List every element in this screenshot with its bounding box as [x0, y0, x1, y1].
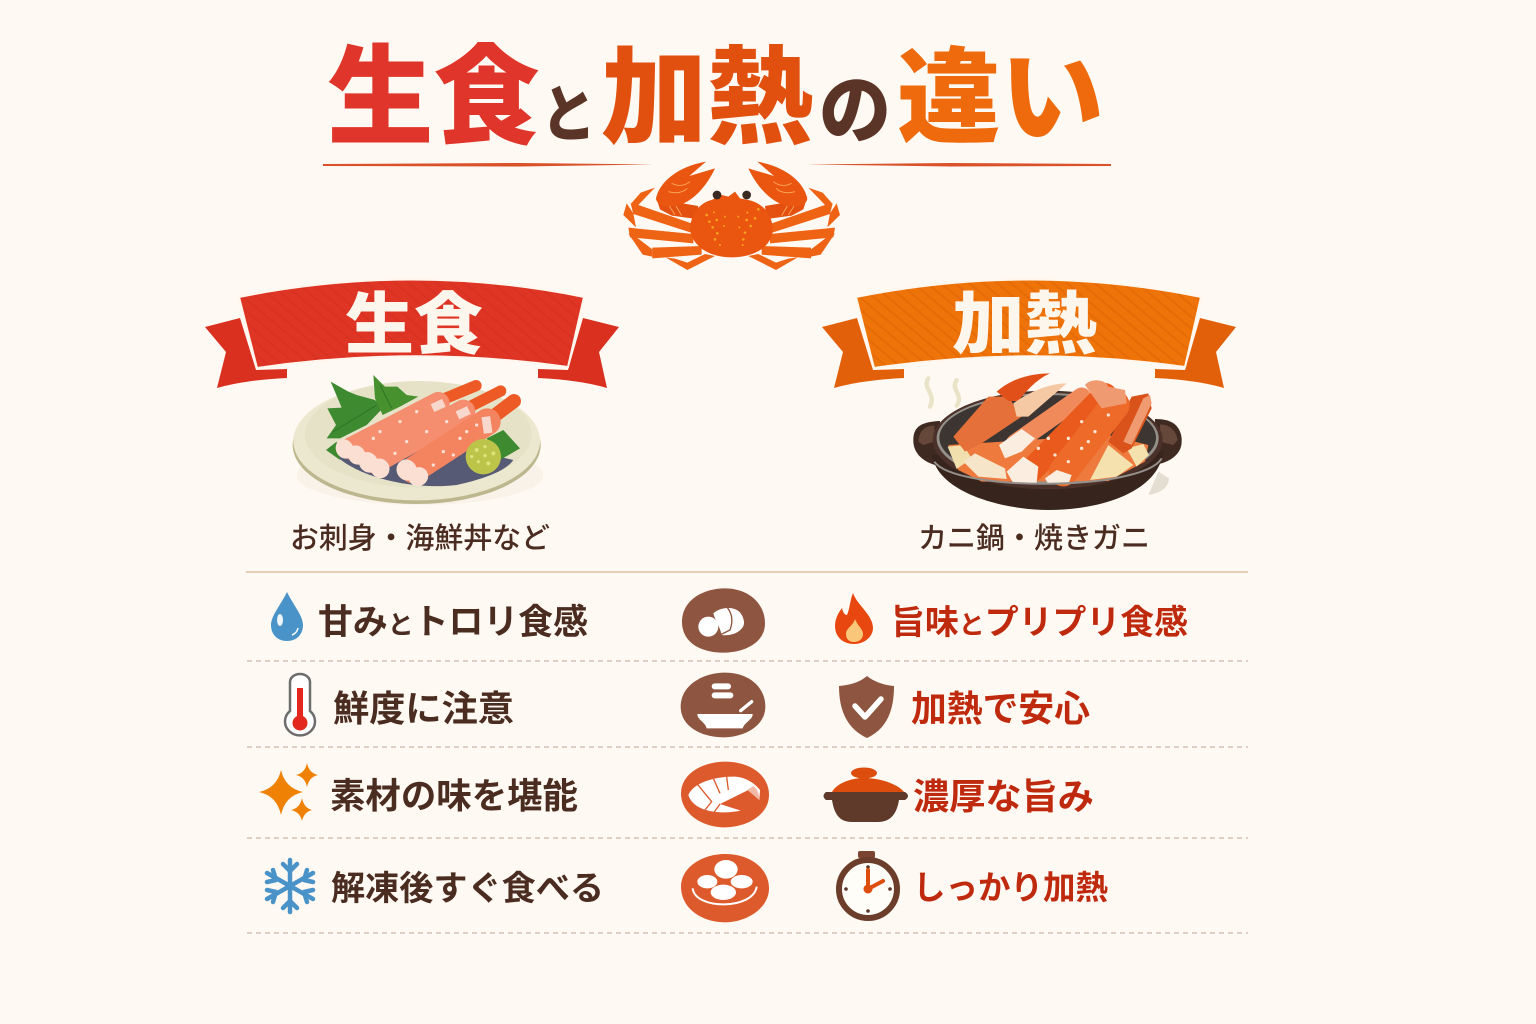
icon: center 3	[681, 762, 769, 827]
text: row 2 right: 加熱で安心	[911, 688, 1090, 729]
title: と	[541, 81, 596, 150]
illustration: cooked crab pot	[913, 373, 1182, 510]
caption: cooked: カニ鍋・焼きガニ	[918, 522, 1150, 555]
title: の	[819, 69, 891, 154]
text: row 1 left: 甘みとトロリ食感	[318, 603, 588, 642]
text: row 2 left: 鮮度に注意	[333, 688, 514, 729]
icon: clock	[839, 851, 897, 918]
icon: shield	[839, 676, 894, 738]
banner: 生食	[205, 280, 619, 388]
icon: pot	[824, 768, 908, 822]
icon: flame	[835, 593, 873, 644]
text: row 3 left: 素材の味を堪能	[330, 776, 578, 816]
title: 生食	[327, 37, 540, 158]
banner: 加熱	[822, 280, 1236, 388]
text: row 4 left: 解凍後すぐ食べる	[331, 870, 604, 908]
title	[327, 37, 1104, 158]
icon: thermometer	[285, 674, 315, 735]
illustration: raw crab plate	[293, 375, 543, 505]
icon: crab	[623, 162, 840, 270]
banner label: 加熱: 加熱	[952, 287, 1097, 363]
caption: raw: お刺身・海鮮丼など	[290, 522, 550, 555]
icon: center 2	[681, 673, 765, 737]
title: 加熱	[601, 40, 813, 158]
text: row 1 right: 旨味とプリプリ食感	[891, 604, 1188, 642]
icon: water drop	[271, 592, 303, 641]
text: row 3 right: 濃厚な旨み	[913, 776, 1094, 817]
icon: sparkles	[259, 763, 318, 821]
icon: snowflake	[267, 860, 313, 912]
text: row 4 right: しっかり加熱	[913, 869, 1108, 906]
icon: center 4	[681, 854, 769, 922]
title: 違い	[897, 41, 1104, 157]
banner label: 生食: 生食	[345, 288, 483, 363]
icon: center 1	[682, 588, 765, 653]
